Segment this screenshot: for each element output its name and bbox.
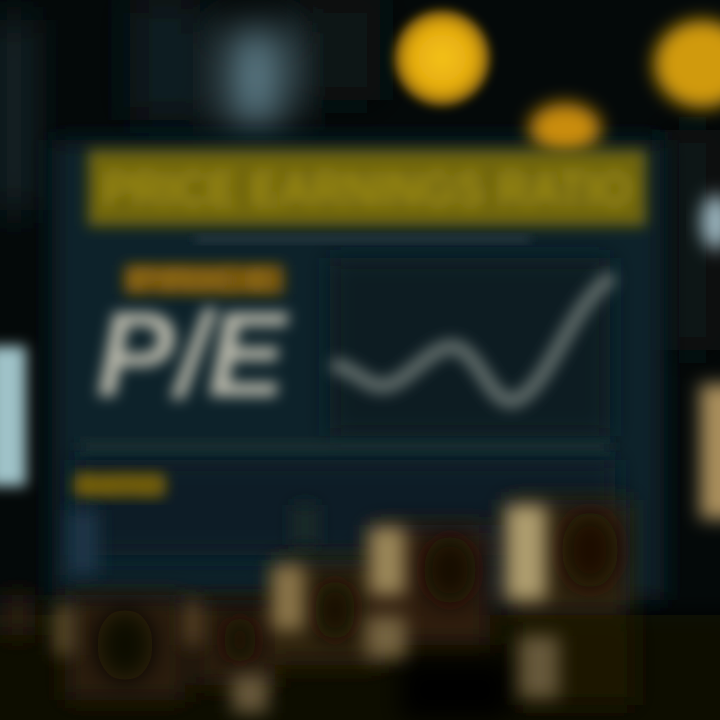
right edge pale light	[701, 194, 720, 250]
small bars	[68, 505, 316, 575]
icon: large yellow light	[394, 10, 490, 106]
dark coin centers	[97, 512, 618, 720]
coin highlights	[54, 505, 559, 713]
small yellow label: RATIO	[78, 473, 162, 500]
heading: PRICE EARNINGS RATIO	[102, 161, 632, 217]
P/E large text: P/E	[96, 286, 289, 422]
dark bottom ground	[0, 615, 720, 720]
icon: small yellow light	[529, 103, 601, 153]
panel: lower board	[75, 460, 615, 555]
label above P/E: PRICE	[129, 264, 279, 295]
panel: board	[52, 140, 664, 600]
coin stacks	[0, 500, 720, 720]
subtitle line	[195, 235, 530, 243]
background light columns	[0, 0, 720, 350]
icon: right yellow light	[654, 20, 720, 108]
divider band	[80, 441, 610, 452]
panel: chart area	[330, 258, 610, 436]
coin stack bodies	[0, 500, 635, 705]
right edge cream panel	[700, 384, 720, 519]
line chart	[338, 280, 608, 401]
label above P/E	[124, 264, 284, 295]
left edge light panel	[0, 346, 26, 486]
heading banner	[88, 150, 646, 226]
